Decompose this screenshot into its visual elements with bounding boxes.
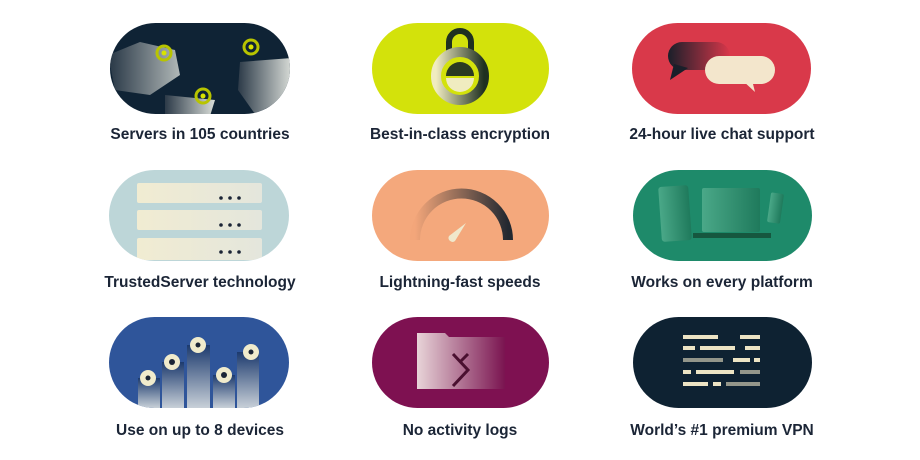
panel: encryption — [372, 23, 549, 114]
label: servers: Servers in 105 countries — [110, 126, 290, 143]
panel: logs — [372, 317, 549, 408]
label: encryption: Best-in-class encryption — [370, 126, 550, 143]
panel: trustedserver — [109, 170, 289, 261]
label: trustedserver: TrustedServer technology — [104, 274, 296, 291]
panel: servers — [108, 23, 292, 116]
label: speed: Lightning-fast speeds — [379, 274, 541, 291]
label: vpn: World’s #1 premium VPN — [630, 422, 814, 439]
label: devices: Use on up to 8 devices — [116, 422, 284, 439]
panel: speed — [372, 170, 549, 261]
label: logs: No activity logs — [403, 422, 517, 439]
panel: platform — [633, 170, 812, 261]
label: platform: Works on every platform — [631, 274, 813, 291]
label: chat: 24-hour live chat support — [629, 126, 815, 143]
panel: vpn — [633, 317, 812, 408]
panel: chat — [632, 23, 811, 114]
panel: devices — [109, 317, 289, 408]
icon: pins — [157, 40, 258, 103]
